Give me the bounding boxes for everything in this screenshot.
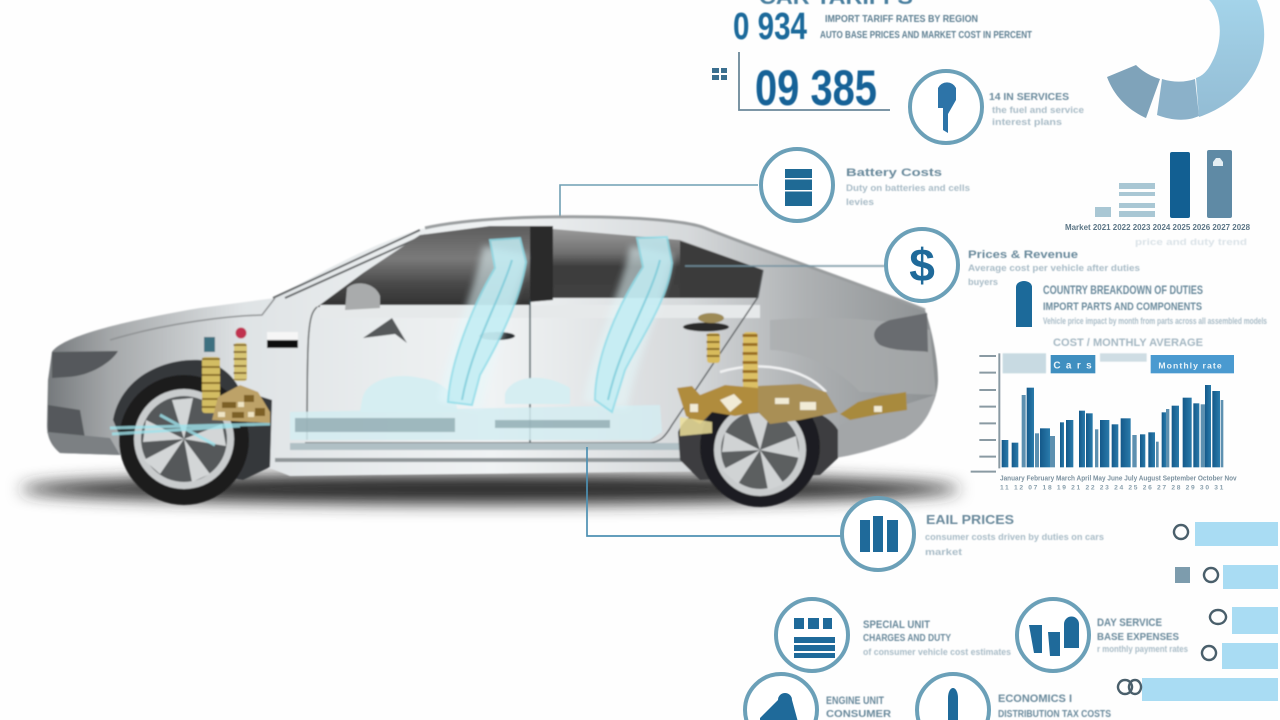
dollar heading: Prices & Revenue	[968, 249, 1078, 261]
battery ring	[761, 149, 833, 221]
parts text	[863, 619, 1011, 657]
key heading: 14 IN SERVICES	[989, 92, 1069, 103]
seats heading: DAY SERVICE	[1097, 617, 1162, 629]
donut middle segment	[1157, 79, 1199, 120]
dollar line: Average cost per vehicle after duties	[968, 263, 1140, 273]
key text	[989, 92, 1084, 127]
stat: large number: 09 385	[755, 60, 877, 116]
column axis labels: Market 2021 2022 2023 2024 2025 2026 2027 2028	[1065, 223, 1251, 232]
belt line band	[320, 305, 760, 318]
icon: seats	[1017, 599, 1089, 671]
seats glyph	[1029, 617, 1079, 656]
tag label two: Monthly rate	[1158, 360, 1222, 370]
coolant cap	[204, 337, 215, 352]
battery text	[846, 167, 970, 207]
cyan axle streak	[110, 415, 270, 445]
door handle front	[479, 332, 515, 340]
bottle glyph	[948, 688, 958, 720]
rear spring right coils	[742, 334, 758, 395]
tag grey	[1003, 353, 1046, 373]
dollar glyph: $	[909, 239, 935, 291]
rear seat back	[595, 237, 672, 412]
bottle sub: DISTRIBUTION TAX COSTS	[998, 709, 1111, 720]
icon: pill	[1016, 281, 1032, 327]
black plate	[267, 340, 298, 348]
bottle heading: ECONOMICS I	[998, 693, 1072, 705]
callout line: pack to car floor	[587, 447, 842, 536]
column icon	[1213, 158, 1223, 166]
stat description	[820, 14, 1032, 41]
tag faint	[1100, 353, 1147, 362]
car body shell	[47, 217, 938, 476]
battery line: Duty on batteries and cells	[846, 183, 970, 193]
key glyph	[938, 82, 956, 133]
front spring left coils	[202, 358, 220, 412]
column grey	[1207, 150, 1232, 218]
x axis values: 11 12 07 18 19 21 22 23 24 25 26 27 28 29 30 31	[1000, 484, 1224, 491]
windshield pillar lines	[273, 230, 425, 298]
red cap	[236, 328, 246, 338]
illustration: car cutaway	[47, 217, 938, 507]
taillight	[874, 313, 928, 352]
small legend blocks	[1095, 183, 1155, 217]
dollar line two: buyers	[968, 277, 998, 287]
rear rim spokes	[722, 412, 800, 490]
rear spring left	[707, 333, 720, 363]
small column chart	[1065, 150, 1251, 247]
key line: the fuel and service	[992, 105, 1084, 115]
icon: fuel bars	[842, 498, 914, 570]
bars glyph	[860, 516, 898, 552]
rear spring right	[743, 332, 758, 396]
dollar ring	[886, 229, 958, 301]
front window	[317, 226, 530, 307]
door line rear diagonal	[305, 270, 763, 443]
chart intro text	[1043, 283, 1267, 349]
icon: key	[910, 71, 982, 143]
front wheel arch	[113, 360, 272, 480]
parts glyph	[794, 618, 835, 658]
tag blue wide	[1151, 355, 1234, 373]
rear tyre	[700, 387, 820, 507]
engine glyph	[760, 693, 798, 720]
front rim inner	[141, 396, 227, 482]
floor tray	[290, 405, 662, 440]
bar chart	[971, 353, 1237, 491]
light blue legend tags	[1118, 522, 1278, 701]
icon: bottle	[917, 674, 989, 720]
battery line two: levies	[846, 197, 874, 207]
rear seat cushion	[505, 378, 570, 404]
small grid icon	[712, 68, 727, 80]
stat: top number: 0 934	[733, 6, 807, 48]
rear gold left	[677, 385, 760, 424]
floor tray dark band	[295, 418, 610, 432]
sill lower	[275, 458, 695, 462]
seat glow	[460, 250, 652, 405]
x axis labels: January February March April May June July August September October Nov	[1000, 474, 1237, 483]
bars ring	[842, 498, 914, 570]
door handle rear	[683, 322, 729, 332]
icon: dollar	[886, 229, 958, 301]
front spring left	[202, 357, 220, 413]
front spring right coils	[234, 344, 246, 380]
bars dark	[1002, 385, 1220, 467]
door line left	[307, 307, 317, 440]
description line one: IMPORT TARIFF RATES BY REGION	[825, 14, 978, 25]
icon: engine	[745, 674, 817, 720]
rear wheel	[700, 387, 820, 507]
front seat back	[448, 238, 526, 405]
front seat cushion	[360, 376, 458, 412]
hood crease	[110, 298, 275, 340]
tag four	[1222, 643, 1278, 669]
front rim	[134, 389, 234, 489]
spring cap	[698, 313, 724, 323]
rear rim	[714, 404, 806, 496]
donut left segment	[1107, 65, 1160, 118]
rear arch edge	[720, 366, 826, 392]
gold engine parts	[212, 385, 270, 423]
tag five	[1142, 678, 1278, 701]
rear rim inner	[721, 411, 799, 489]
faint caption: price and duty trend	[1135, 237, 1247, 247]
L-shaped frame	[739, 52, 890, 110]
rear side shading	[770, 318, 936, 395]
seats text	[1097, 617, 1188, 654]
rear gold right	[840, 392, 907, 420]
column navy	[1170, 152, 1190, 218]
battery heading: Battery Costs	[846, 167, 942, 179]
B pillar	[530, 226, 553, 302]
callout line: battery to car roof	[560, 185, 758, 224]
bars light	[1022, 395, 1223, 467]
roof highlight	[425, 217, 925, 310]
tag three	[1232, 607, 1278, 634]
rear spring left coils	[706, 334, 720, 362]
yellow haze	[680, 417, 712, 436]
parts heading: SPECIAL UNIT	[863, 619, 930, 631]
callout line: dollar to rear window	[685, 265, 885, 267]
fuel text	[925, 512, 1104, 557]
fuel line: consumer costs driven by duties on cars	[925, 532, 1104, 542]
description line two: AUTO BASE PRICES AND MARKET COST IN PERCENT	[820, 30, 1032, 41]
key ring	[910, 71, 982, 143]
front suspension	[202, 328, 270, 423]
front tyre	[119, 375, 249, 505]
rear gold highlights	[690, 394, 882, 412]
key line two: interest plans	[992, 117, 1062, 127]
headlight	[52, 351, 118, 378]
front rim spokes	[143, 398, 226, 482]
rear suspension	[677, 313, 907, 436]
seats sub: BASE EXPENSES	[1097, 632, 1179, 643]
chart heading: COST / MONTHLY AVERAGE	[1053, 337, 1203, 349]
engine heading: ENGINE UNIT	[826, 695, 884, 707]
tag one	[1195, 522, 1278, 546]
front seat highlight	[462, 260, 512, 400]
seats detail: r monthly payment rates	[1097, 644, 1188, 654]
mirror shadow	[363, 318, 407, 343]
icon: parts blocks	[776, 599, 848, 671]
engine ring	[745, 674, 817, 720]
rear bumper	[835, 395, 935, 458]
engine sub: CONSUMER	[826, 709, 892, 720]
donut arc main	[1196, 0, 1264, 117]
parts ring	[776, 599, 848, 671]
tag label one: Cars	[1053, 360, 1092, 371]
front bumper lower	[47, 432, 120, 455]
parts sub: CHARGES AND DUTY	[863, 633, 951, 644]
tag two	[1223, 565, 1278, 589]
side mirror	[345, 283, 380, 310]
front spring right	[234, 343, 247, 381]
front wheel	[119, 375, 249, 505]
donut chart	[1107, 0, 1264, 120]
engine highlights	[218, 402, 254, 417]
bottle text	[998, 693, 1111, 720]
rear window	[553, 229, 763, 298]
rear wheel arch	[678, 410, 838, 480]
icon: battery	[761, 149, 833, 221]
rear seat highlight	[608, 260, 660, 400]
fuel heading: EAIL PRICES	[926, 512, 1014, 527]
sill	[290, 443, 685, 450]
bottle ring	[917, 674, 989, 720]
engine text	[826, 695, 892, 720]
door line center	[529, 300, 531, 443]
intro sub line: IMPORT PARTS AND COMPONENTS	[1043, 301, 1202, 313]
battery glyph	[785, 169, 812, 206]
small grey tile	[1175, 567, 1190, 583]
intro heading: COUNTRY BREAKDOWN OF DUTIES	[1043, 283, 1203, 297]
chart legend tags	[1003, 353, 1234, 373]
small globe icons	[1118, 525, 1226, 694]
tag blue	[1051, 355, 1095, 373]
white plate	[267, 332, 298, 340]
front bumper dark	[48, 405, 85, 438]
dollar text	[968, 249, 1140, 287]
seats ring	[1017, 599, 1089, 671]
y axis	[971, 353, 999, 472]
rear gold center	[758, 384, 838, 424]
rear window dark corner	[680, 241, 763, 298]
ground shadow under car	[20, 474, 960, 504]
parts detail: of consumer vehicle cost estimates	[863, 647, 1011, 657]
engine mottling	[222, 395, 265, 418]
fuel line two: market	[925, 547, 962, 557]
